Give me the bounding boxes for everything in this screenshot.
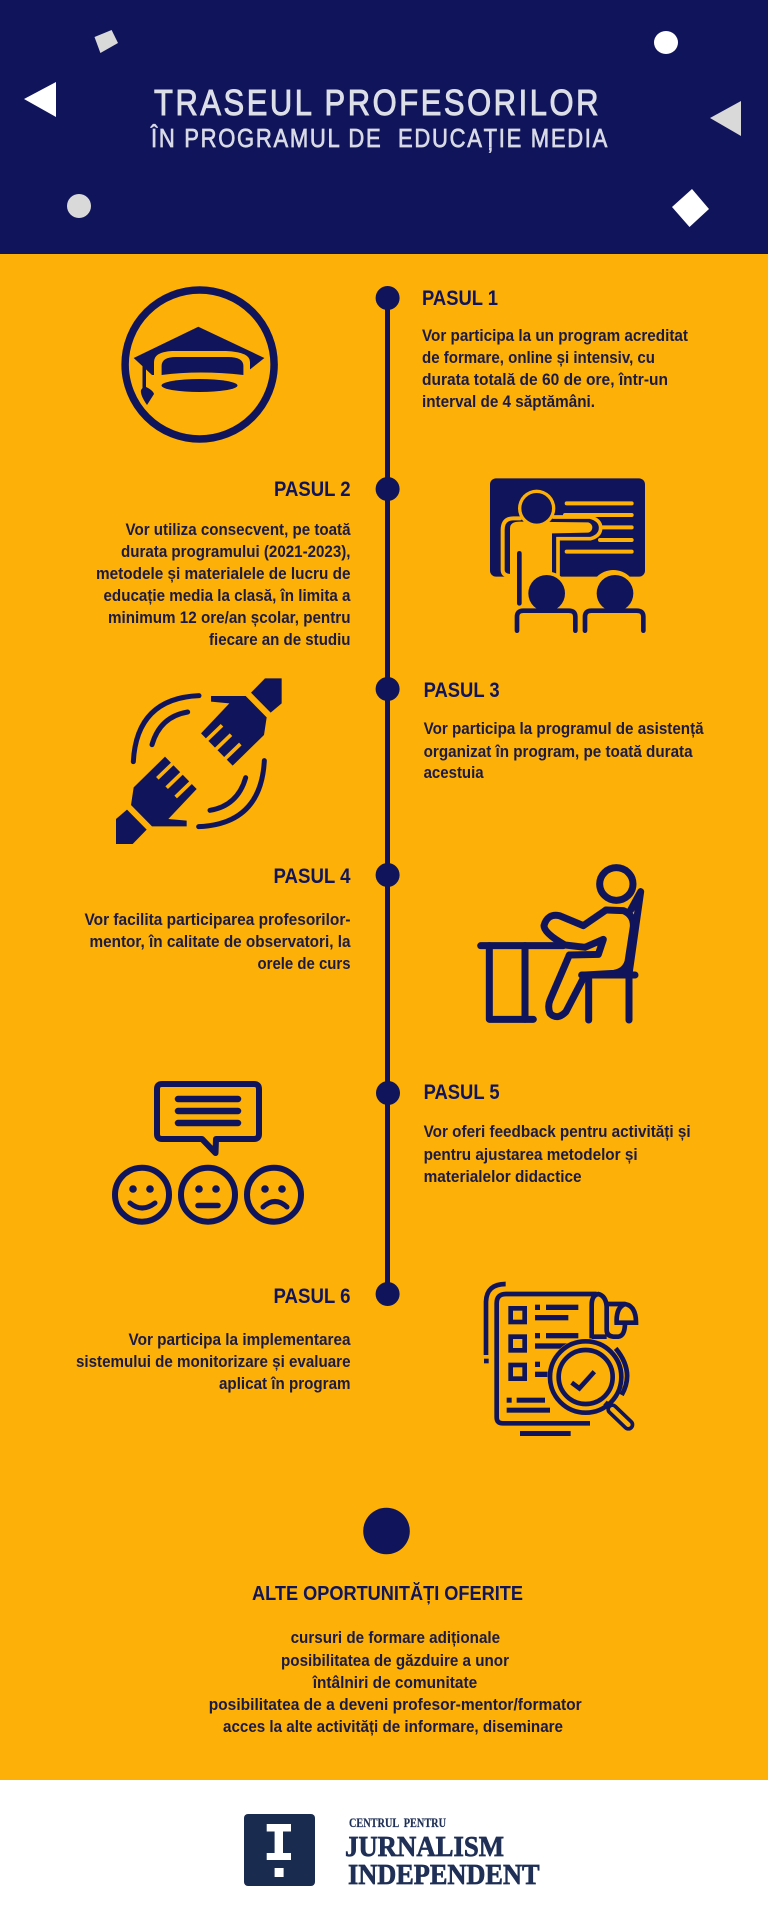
icon: checklist and magnifying glass xyxy=(484,1284,636,1436)
opportunities list xyxy=(209,1629,582,1736)
opportunities list: întâlniri de comunitate xyxy=(312,1674,477,1692)
step 1 text: de formare, online și intensiv, cu xyxy=(422,349,655,367)
subtitle: ÎN PROGRAMUL DE EDUCAȚIE MEDIA xyxy=(150,123,609,153)
decorative white triangle left xyxy=(24,82,56,117)
step 1 text: Vor participa la un program acreditat xyxy=(422,327,688,345)
step 4 text: mentor, în calitate de observatori, la xyxy=(90,933,351,951)
step 5 text: Vor oferi feedback pentru activități și xyxy=(424,1123,691,1141)
step 6 text: sistemului de monitorizare și evaluare xyxy=(76,1353,350,1371)
opportunities list: acces la alte activități de informare, diseminare xyxy=(223,1718,563,1736)
decorative white diamond lower right xyxy=(672,189,709,227)
icon: handshake xyxy=(116,678,282,844)
icon: person seated at desk xyxy=(481,868,641,1020)
decorative grey triangle right xyxy=(710,101,741,136)
icon: feedback bubble and faces xyxy=(115,1084,301,1222)
timeline line and dots xyxy=(376,286,400,1306)
step 4 text: PASUL 4 xyxy=(274,865,351,888)
step 3 text xyxy=(424,679,704,782)
step 1 text xyxy=(422,287,688,411)
step 2 text: minimum 12 ore/an școlar, pentru xyxy=(108,609,350,627)
icon: teacher presenting to students xyxy=(490,478,647,634)
icon: graduation cap xyxy=(125,290,274,439)
step 5 text: PASUL 5 xyxy=(424,1081,500,1104)
step 3 text: acestuia xyxy=(424,764,484,782)
step 4 text xyxy=(84,865,351,973)
header panel xyxy=(0,0,768,254)
step 6 text xyxy=(76,1285,351,1393)
step 2 text: metodele și materialele de lucru de xyxy=(96,565,350,583)
decorative grey circle lower left xyxy=(67,194,91,218)
step 3 text: PASUL 3 xyxy=(424,679,500,702)
step 5 text: materialelor didactice xyxy=(424,1168,582,1186)
closing timeline dot xyxy=(363,1508,410,1554)
step 5 text: pentru ajustarea metodelor și xyxy=(424,1146,638,1164)
step 4 text: orele de curs xyxy=(258,955,350,973)
step 2 text: durata programului (2021-2023), xyxy=(121,543,350,561)
logo wordmark: INDEPENDENT xyxy=(348,1859,540,1891)
step 2 text: Vor utiliza consecvent, pe toată xyxy=(126,521,351,539)
step 3 text: Vor participa la programul de asistență xyxy=(424,720,704,738)
step 3 text: organizat în program, pe toată durata xyxy=(424,743,693,761)
decorative white circle top right xyxy=(654,31,678,54)
step 2 text: fiecare an de studiu xyxy=(209,631,350,649)
decorative grey diamond top left xyxy=(94,30,118,53)
background: yellow body xyxy=(0,253,768,1780)
step 6 text: aplicat în program xyxy=(219,1375,350,1393)
opportunities list: posibilitatea de găzduire a unor xyxy=(281,1652,510,1670)
other opportunities heading: ALTE OPORTUNITĂȚI OFERITE xyxy=(252,1582,523,1605)
step 1 text: durata totală de 60 de ore, într-un xyxy=(422,371,668,389)
opportunities list: cursuri de formare adiționale xyxy=(291,1629,500,1647)
opportunities list: posibilitatea de a deveni profesor-mentor/formator xyxy=(209,1696,582,1714)
logo wordmark: CENTRUL PENTRU xyxy=(349,1816,446,1830)
step 1 text: interval de 4 săptămâni. xyxy=(422,393,595,411)
step 2 text xyxy=(96,478,351,649)
step 5 text xyxy=(424,1081,691,1186)
step 6 text: Vor participa la implementarea xyxy=(128,1331,351,1349)
step 1 text: PASUL 1 xyxy=(422,287,498,310)
step 2 text: educație media la clasă, în limita a xyxy=(104,587,351,605)
title: TRASEUL PROFESORILOR xyxy=(154,82,601,123)
footer panel xyxy=(0,1780,768,1920)
step 6 text: PASUL 6 xyxy=(274,1285,350,1308)
logo wordmark xyxy=(345,1816,540,1891)
step 2 text: PASUL 2 xyxy=(274,478,350,501)
logo mark xyxy=(244,1814,315,1886)
logo wordmark: JURNALISM xyxy=(345,1831,504,1863)
other opportunities panel xyxy=(209,1582,582,1736)
step 4 text: Vor facilita participarea profesorilor- xyxy=(84,911,350,929)
